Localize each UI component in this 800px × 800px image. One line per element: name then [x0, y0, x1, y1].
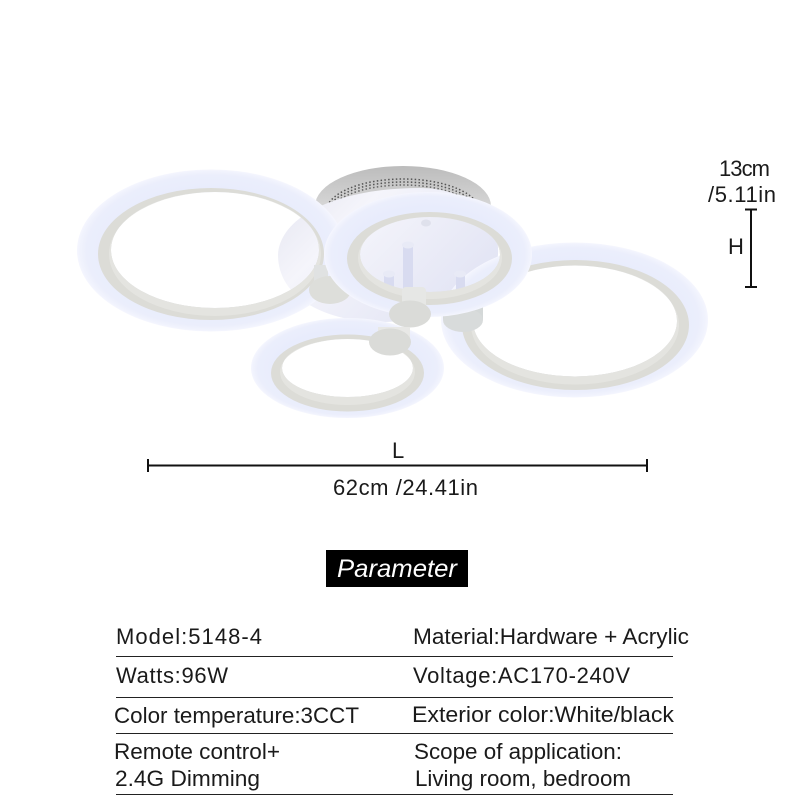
row 2: watts and voltage: Watts:96W [116, 663, 228, 688]
length bracket [148, 459, 647, 472]
row 3: color temperature and exterior color: Color temperature:3CCT [114, 703, 359, 728]
ring: left large [77, 170, 345, 332]
lamp base: white mounting disc [278, 188, 498, 322]
height value: /5.11in [708, 182, 776, 207]
row 1: model and material: Model:5148-4 [116, 624, 262, 649]
height bracket [745, 210, 757, 287]
ring: bottom small [251, 318, 444, 418]
ceiling lamp illustration [77, 166, 708, 418]
ring: top center [324, 192, 532, 317]
row 2: watts and voltage: Voltage:AC170-240V [413, 663, 630, 688]
support posts [383, 220, 466, 304]
height value: 13cm [719, 156, 770, 181]
row 2: watts and voltage [116, 663, 630, 688]
length dimension [148, 438, 647, 500]
row 4: remote control and scope of application: Remote control+ [114, 739, 280, 764]
length label: L [392, 438, 404, 463]
row 1: model and material: Material:Hardware + Acrylic [413, 624, 689, 649]
row 3: color temperature and exterior color [114, 702, 675, 728]
connector hub: right ring [443, 306, 483, 332]
height dimension [708, 156, 776, 287]
parameter table [114, 624, 689, 794]
lamp base: perforated dome [315, 166, 491, 251]
row 4: remote control and scope of application: 2.4G Dimming [115, 766, 260, 791]
heading: Parameter [326, 550, 468, 587]
connector hub: center ring [389, 287, 431, 328]
ring: right large [441, 242, 708, 398]
row 4: remote control and scope of application: Living room, bedroom [415, 766, 631, 791]
row 1: model and material [116, 624, 689, 649]
heading: Parameter: Parameter [337, 555, 459, 583]
connector hub: bottom ring [369, 327, 411, 356]
row 4: remote control and scope of application: Scope of application: [414, 739, 622, 764]
connector hub: left ring [309, 265, 351, 304]
row 4: remote control and scope of application [114, 739, 631, 791]
row 3: color temperature and exterior color: Exterior color:White/black [412, 702, 675, 727]
height label: H [728, 234, 744, 259]
height value [708, 156, 776, 207]
length value: 62cm /24.41in [333, 475, 478, 500]
